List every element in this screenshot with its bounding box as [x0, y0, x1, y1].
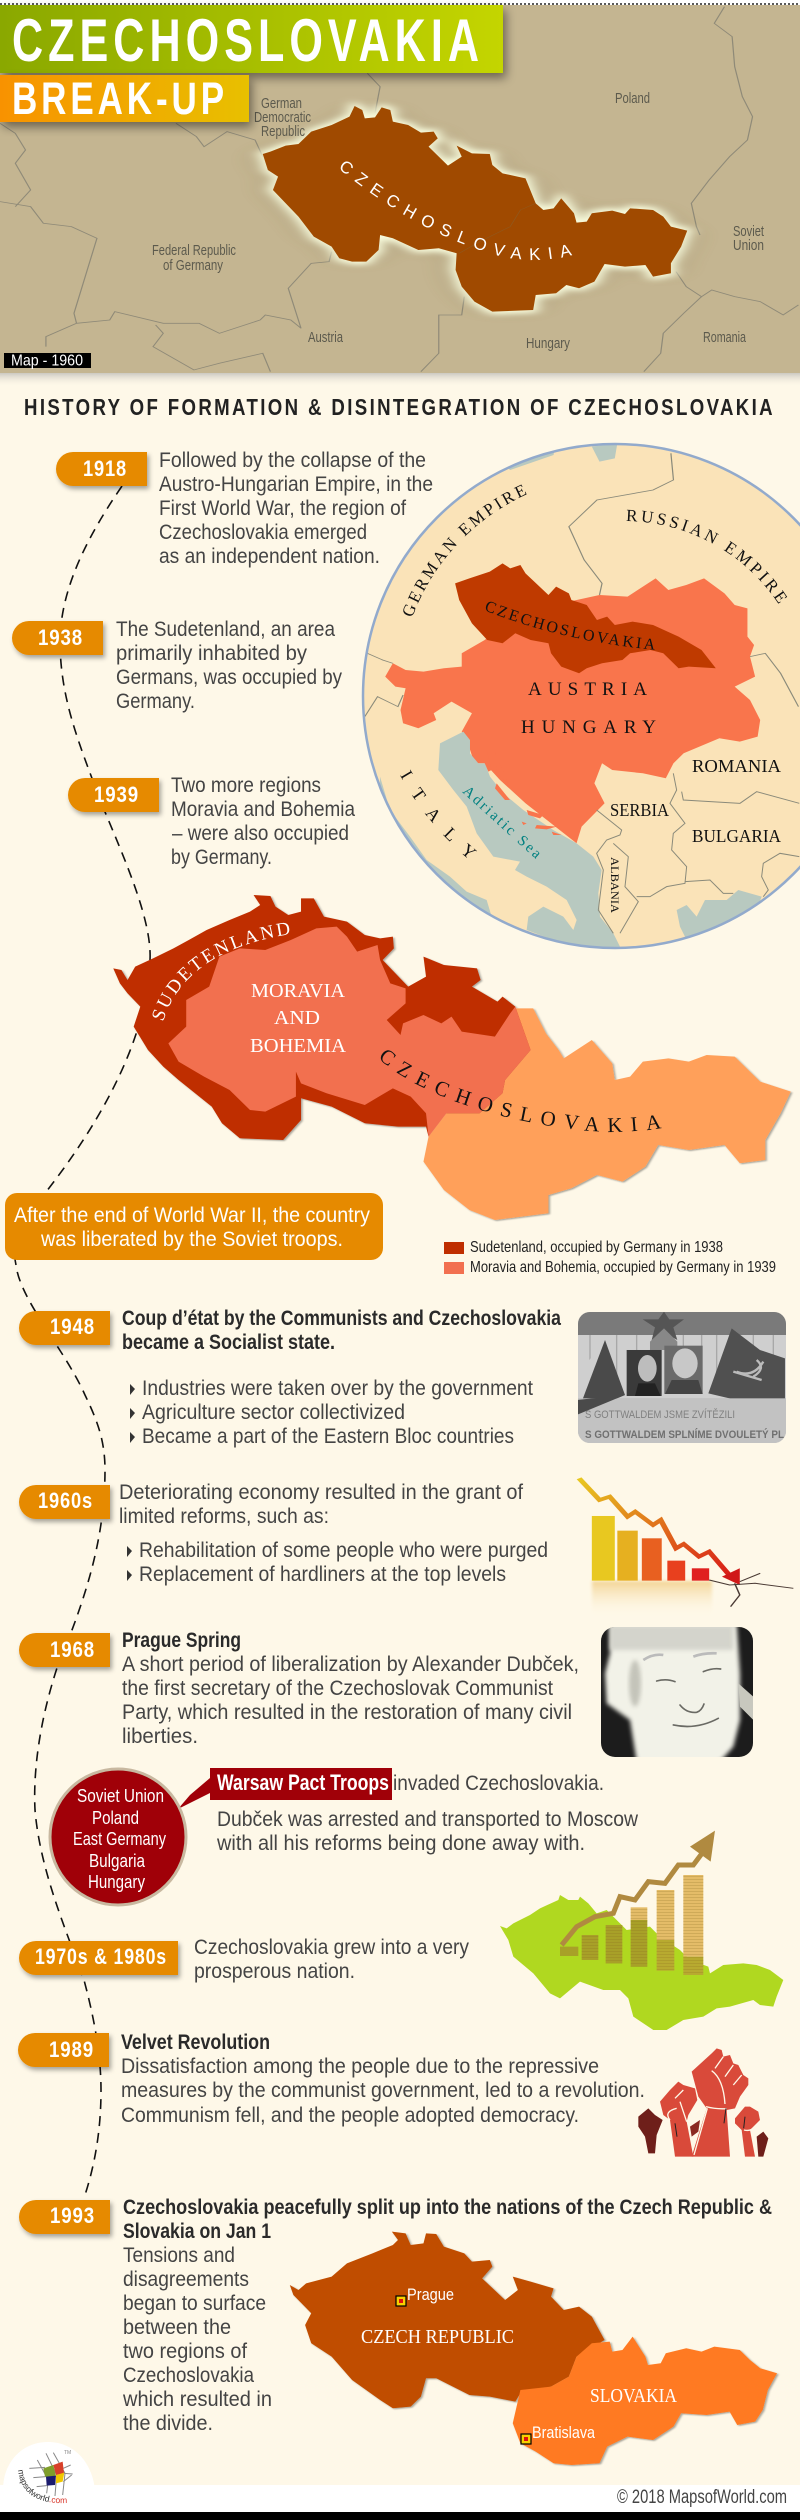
event 1939: Two more regions: [171, 774, 321, 797]
occupation map labels: AND: [274, 1007, 320, 1029]
globe labels: CZECHOSLOVAKIA: [486, 602, 655, 650]
globe labels: [400, 484, 788, 913]
event 1968: [19, 1629, 579, 1748]
globe labels: ROMANIA: [692, 756, 781, 776]
event 1938: The Sudetenland, an area: [116, 618, 335, 641]
event 1960s: Deteriorating economy resulted in the grant of: [119, 1481, 523, 1504]
event 1939: 1939: [94, 782, 139, 807]
northern seas: [509, 445, 617, 470]
event 1938: 1938: [38, 625, 83, 650]
neighbouring country labels: [152, 90, 765, 352]
Warsaw Pact countries bubble: [50, 1769, 210, 1905]
event 1918: First World War, the region of: [159, 497, 406, 520]
event 1989: [18, 2031, 645, 2127]
icon: raised fists: [638, 2048, 768, 2157]
event 1948: Became a part of the Eastern Bloc countries: [142, 1425, 514, 1448]
legend: [444, 1239, 776, 1276]
occupation map labels: BOHEMIA: [250, 1035, 347, 1057]
neighbouring country labels: Poland: [615, 90, 650, 107]
event 1939: by Germany.: [171, 846, 272, 869]
Warsaw Pact countries bubble: East Germany: [73, 1829, 166, 1849]
globe labels: ALBANIA: [608, 857, 622, 913]
event 1989: measures by the communist government, led to a revolution.: [121, 2079, 645, 2102]
event 1938: primarily inhabited by: [116, 642, 307, 665]
map labels and capital markers: CZECH REPUBLIC: [361, 2326, 514, 2348]
event 1970s & 1980s: 1970s & 1980s: [35, 1944, 167, 1969]
Warsaw Pact countries bubble: Bulgaria: [89, 1851, 146, 1871]
Warsaw Pact countries bubble: Poland: [92, 1808, 139, 1828]
event 1993: between the: [123, 2316, 231, 2339]
event 1993: which resulted in: [122, 2388, 272, 2411]
event 1993: two regions of: [123, 2340, 247, 2363]
event 1993: 1993: [50, 2203, 95, 2228]
event 1960s: limited reforms, such as:: [119, 1505, 329, 1528]
event 1968: Prague Spring: [122, 1629, 241, 1652]
logo: mapsofworld.com: [18, 2470, 67, 2504]
neighbouring country labels: Soviet: [733, 223, 765, 240]
event 1993: Tensions and: [123, 2244, 235, 2267]
subtitle banner: Break-up: BREAK-UP: [12, 73, 228, 124]
event 1968: the first secretary of the Czechoslovak Communist: [122, 1677, 553, 1700]
globe labels: BULGARIA: [692, 826, 781, 846]
event 1968: A short period of liberalization by Alexander Dubček,: [122, 1653, 579, 1676]
Warsaw Pact text: Dubček was arrested and transported to Moscow: [217, 1808, 639, 1831]
event 1968: liberties.: [122, 1725, 198, 1748]
map labels and capital markers: [361, 2285, 677, 2444]
event 1960s: [19, 1481, 548, 1586]
event 1993: disagreements: [123, 2268, 249, 2291]
event 1939: Moravia and Bohemia: [171, 798, 355, 821]
event 1918: Followed by the collapse of the: [159, 449, 426, 472]
event 1989: Dissatisfaction among the people due to the repressive: [121, 2055, 599, 2078]
neighbouring country labels: Hungary: [526, 335, 570, 352]
occupation map labels: [152, 922, 662, 1132]
event 1993: Slovakia on Jan 1: [123, 2220, 271, 2243]
photo: 1948 communist rally: S GOTTWALDEM JSME ZVÍTĚZILI: [585, 1408, 735, 1421]
event 1960s: Replacement of hardliners at the top levels: [139, 1563, 506, 1586]
event 1989: Velvet Revolution: [121, 2031, 270, 2054]
event 1989: 1989: [49, 2037, 94, 2062]
event 1948: Coup d’état by the Communists and Czechoslovakia: [122, 1307, 561, 1330]
event 1918: as an independent nation.: [159, 545, 380, 568]
map labels and capital markers: SLOVAKIA: [590, 2385, 677, 2407]
callout: liberated by Soviet troops: was liberated by the Soviet troops.: [40, 1228, 343, 1251]
Warsaw Pact text: with all his reforms being done away with.: [216, 1832, 585, 1855]
event 1970s & 1980s: prosperous nation.: [194, 1960, 355, 1983]
Adriatic and southern seas: [380, 732, 799, 950]
neighbouring country labels: Republic: [261, 123, 305, 140]
event 1993: the divide.: [123, 2412, 213, 2435]
neighbouring country labels: Federal Republic: [152, 242, 236, 259]
map: Czech Republic and Slovakia: [290, 2232, 777, 2465]
event 1918: Czechoslovakia emerged: [159, 521, 367, 544]
event 1918: 1918: [83, 456, 127, 481]
callout: liberated by Soviet troops: After the end of World War II, the country: [14, 1204, 370, 1227]
Warsaw Pact text: [210, 1768, 639, 1855]
globe labels: HUNGARY: [521, 717, 656, 738]
event 1968: 1968: [50, 1637, 95, 1662]
Warsaw Pact countries bubble: Hungary: [88, 1872, 145, 1892]
event 1993: Czechoslovakia: [123, 2364, 254, 2387]
icon: green map with rising coins: [500, 1831, 783, 2030]
event 1938: Germans, was occupied by: [116, 666, 342, 689]
globe labels: GERMAN EMPIRE: [403, 484, 527, 616]
neighbouring country labels: Romania: [703, 329, 746, 346]
globe labels: SERBIA: [610, 800, 669, 820]
neighbouring country labels: Austria: [308, 329, 343, 346]
photo: Alexander Dubcek: [600, 1623, 753, 1762]
logo: [3, 2442, 94, 2504]
map date tag: Map - 1960: [11, 352, 83, 370]
event 1948: Industries were taken over by the government: [142, 1377, 533, 1400]
occupation map: [113, 895, 794, 1222]
occupation map labels: CZECHOSLOVAKIA: [380, 1050, 662, 1132]
event 1993: [19, 2196, 772, 2435]
callout: liberated by Soviet troops: [5, 1193, 383, 1260]
occupation map labels: SUDETENLAND: [152, 922, 290, 1020]
globe labels: RUSSIAN EMPIRE: [626, 510, 788, 604]
Warsaw Pact countries bubble: Soviet Union: [77, 1786, 164, 1806]
event 1989: Communism fell, and the people adopted democracy.: [121, 2104, 579, 2127]
occupation map labels: MORAVIA: [251, 980, 346, 1002]
map borders: [0, 7, 798, 372]
map labels and capital markers: Prague: [407, 2285, 454, 2304]
Warsaw Pact text: Warsaw Pact Troops: [217, 1770, 389, 1795]
neighbouring country labels: of Germany: [163, 257, 223, 274]
neighbouring country labels: German: [261, 95, 302, 112]
globe labels: ITALY: [400, 770, 477, 858]
Czechoslovakia shape with glow: [263, 106, 687, 312]
event 1948: Agriculture sector collectivized: [142, 1401, 405, 1424]
event 1918: [56, 449, 433, 568]
event 1970s & 1980s: [19, 1936, 469, 1983]
header map 1960: [0, 0, 800, 382]
event 1939: – were also occupied: [172, 822, 349, 845]
event 1918: Austro-Hungarian Empire, in the: [159, 473, 433, 496]
neighbouring country labels: Democratic: [254, 109, 311, 126]
Warsaw Pact text: invaded Czechoslovakia.: [393, 1772, 604, 1795]
globe labels: Adriatic Sea: [462, 788, 540, 859]
globe map of Austria-Hungary: [362, 442, 800, 950]
Austria-Hungary territory: [365, 453, 798, 843]
event 1993: began to surface: [123, 2292, 266, 2315]
map labels and capital markers: Bratislava: [532, 2423, 595, 2442]
event 1948: [19, 1307, 561, 1448]
logo: TM: [64, 2450, 71, 2456]
event 1960s: Rehabilitation of some people who were purged: [139, 1539, 548, 1562]
dashed timeline: [15, 486, 150, 2198]
event 1960s: 1960s: [38, 1488, 93, 1513]
neighbouring country labels: Union: [733, 237, 764, 254]
event 1970s & 1980s: Czechoslovakia grew into a very: [194, 1936, 469, 1959]
event 1948: became a Socialist state.: [122, 1331, 335, 1354]
footer band: [0, 2485, 800, 2520]
event 1939: [68, 774, 355, 869]
legend: Sudetenland, occupied by Germany in 1938: [470, 1239, 723, 1256]
globe labels: AUSTRIA: [528, 679, 647, 700]
event 1938: [12, 618, 342, 713]
photo: 1948 communist rally: [577, 1312, 787, 1445]
map country name: CZECHOSLOVAKIA: [340, 162, 572, 260]
event 1938: Germany.: [116, 690, 195, 713]
title banner: Czechoslovakia: CZECHOSLOVAKIA: [12, 7, 484, 74]
icon: falling bar chart: [579, 1478, 793, 1617]
event 1948: 1948: [50, 1314, 95, 1339]
event 1968: Party, which resulted in the restoration of many civil: [122, 1701, 572, 1724]
